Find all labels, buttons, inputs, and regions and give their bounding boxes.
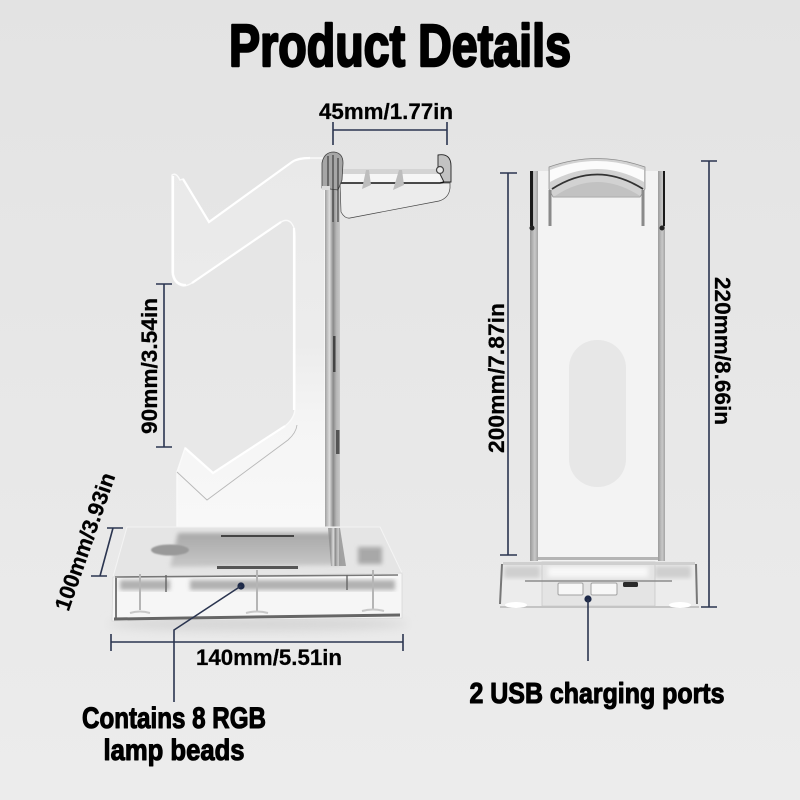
dimension: 100mm depth: 100mm/3.93in bbox=[50, 469, 120, 614]
acrylic back panel bbox=[172, 158, 325, 528]
hook pegs bbox=[362, 170, 371, 189]
base pillars bbox=[130, 570, 384, 613]
title: Product Details bbox=[229, 13, 571, 79]
lower chevron crease bbox=[177, 425, 297, 500]
headset hook arm bbox=[340, 155, 451, 218]
base front face bbox=[112, 573, 402, 621]
front panel bbox=[530, 171, 665, 561]
dimension: 90mm height bbox=[137, 284, 172, 447]
dimension: 140mm width bbox=[111, 634, 403, 670]
panel inner bottom edge bbox=[538, 557, 658, 560]
left rail bbox=[530, 171, 538, 561]
column foot bbox=[328, 528, 346, 566]
oval cut-out bbox=[569, 340, 626, 487]
shadow under base bbox=[108, 617, 408, 631]
headset hook bbox=[549, 158, 645, 226]
dimension: 220mm height bbox=[701, 161, 735, 607]
USB-C port bbox=[623, 582, 638, 587]
dimension: 200mm height: 200mm/7.87in bbox=[484, 303, 509, 453]
base top surface bbox=[113, 527, 402, 577]
white panel edge bbox=[173, 158, 310, 473]
front base bbox=[500, 562, 699, 606]
dimension: 90mm height: 90mm/3.54in bbox=[137, 298, 162, 434]
product: front view of stand bbox=[500, 158, 699, 608]
callout: USB charging ports bbox=[470, 595, 724, 710]
dimension: 220mm height: 220mm/8.66in bbox=[710, 277, 735, 425]
dimension: 140mm width: 140mm/5.51in bbox=[196, 645, 342, 670]
dimension: 45mm width bbox=[319, 99, 453, 145]
vertical column bbox=[325, 188, 340, 528]
callout: RGB lamp beads bbox=[82, 582, 266, 767]
dimension: 45mm width: 45mm/1.77in bbox=[319, 99, 453, 124]
USB ports bbox=[558, 583, 617, 595]
dimension: 200mm height bbox=[484, 173, 517, 555]
callout: RGB lamp beads: Contains 8 RGB bbox=[82, 702, 266, 735]
callout: USB charging ports: 2 USB charging ports bbox=[470, 678, 724, 710]
right rail bbox=[658, 171, 665, 561]
product: side view of headset stand bbox=[108, 152, 451, 631]
callout: RGB lamp beads: lamp beads bbox=[104, 734, 244, 767]
